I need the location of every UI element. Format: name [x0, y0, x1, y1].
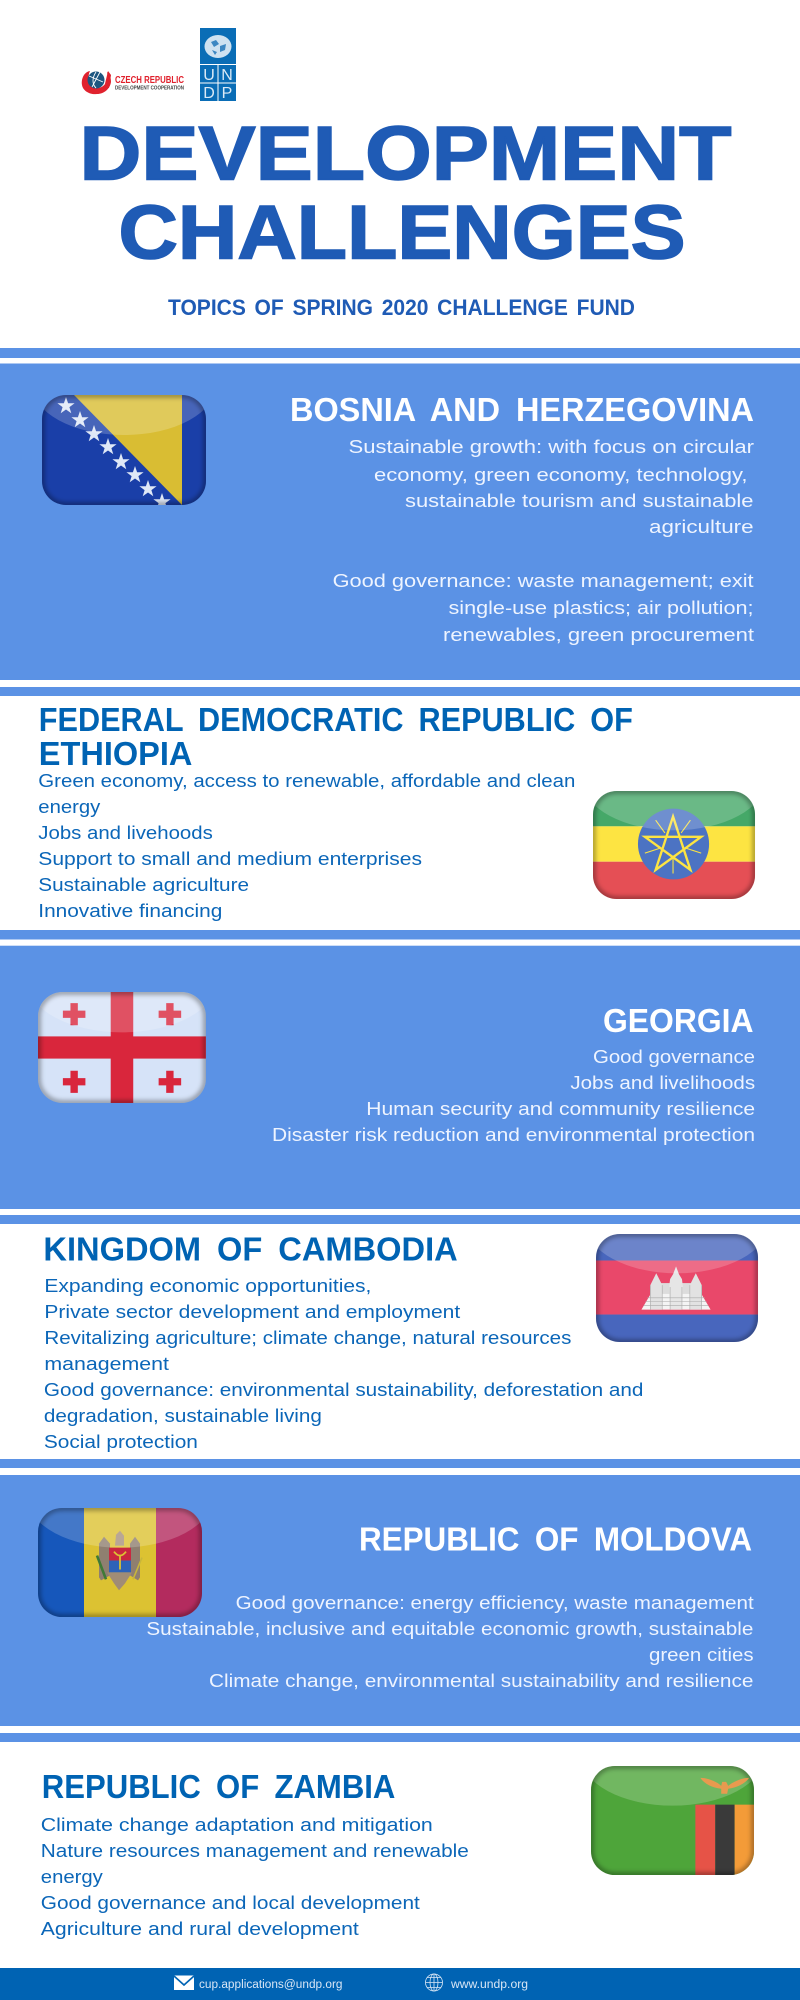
icon: flag of Moldova — [38, 1508, 202, 1617]
text block: Georgia topics: Human security and community resilience — [366, 1098, 755, 1119]
text block: Ethiopia topics: Green economy, access to renewable, affordable and clean — [38, 770, 575, 791]
logo: UNDP — [200, 28, 236, 102]
text block: Zambia topics: Nature resources management and renewable — [41, 1840, 469, 1861]
subtitle: TOPICS OF SPRING 2020 CHALLENGE FUND — [168, 295, 635, 320]
heading: Bosnia and Herzegovina: BOSNIA AND HERZEGOVINA — [290, 391, 754, 428]
text block: Ethiopia topics: Sustainable agriculture — [38, 874, 249, 895]
text block: Bosnia topics: Good governance: waste management; exit — [333, 570, 754, 591]
heading: Moldova: REPUBLIC OF MOLDOVA — [359, 1521, 752, 1558]
text block: Zambia topics: energy — [41, 1866, 104, 1887]
text block: Bosnia topics: sustainable tourism and sustainable — [405, 490, 754, 511]
text block: Cambodia topics — [44, 1275, 643, 1452]
icon: flag of Ethiopia — [593, 791, 755, 899]
text block: Bosnia topics — [333, 436, 754, 645]
logo: Czech Republic Development Cooperation — [82, 71, 184, 94]
text block: Ethiopia topics: Support to small and medium enterprises — [38, 848, 422, 869]
text block: Cambodia topics: management — [44, 1353, 169, 1374]
panel: Republic of Zambia — [40, 1766, 754, 1939]
text block: Moldova topics: Good governance: energy efficiency, waste management — [236, 1592, 754, 1613]
text block: Ethiopia topics: Jobs and livehoods — [38, 822, 213, 843]
icon: flag of Georgia — [38, 992, 206, 1103]
heading: Ethiopia: FEDERAL DEMOCRATIC REPUBLIC OF — [39, 701, 633, 738]
title — [80, 112, 731, 276]
text block: Moldova topics: green cities — [649, 1644, 754, 1665]
icon: flag of Cambodia — [596, 1234, 758, 1342]
heading: Zambia: REPUBLIC OF ZAMBIA — [42, 1768, 395, 1805]
logo: UNDP: D — [203, 85, 215, 102]
footer bar — [0, 1968, 800, 2000]
text block: Ethiopia topics — [38, 770, 575, 921]
text block: Bosnia topics: agriculture — [649, 516, 754, 537]
text block: Moldova topics: Climate change, environmental sustainability and resilience — [209, 1670, 753, 1691]
panel: Bosnia and Herzegovina — [0, 335, 800, 680]
logo: Czech Republic Development Cooperation: DEVELOPMENT COOPERATION — [115, 86, 184, 92]
logo: UNDP: U — [203, 67, 215, 84]
heading: Georgia: GEORGIA — [603, 1002, 754, 1039]
text block: Bosnia topics: renewables, green procurement — [443, 624, 754, 645]
contact: email: cup.applications@undp.org — [199, 1979, 342, 1991]
text block: Georgia topics: Disaster risk reduction and environmental protection — [272, 1124, 755, 1145]
panel: Federal Democratic Republic of Ethiopia — [38, 708, 755, 921]
icon: flag of Zambia — [591, 1766, 754, 1875]
text block: Bosnia topics: Sustainable growth: with focus on circular — [348, 436, 754, 457]
text block: Georgia topics: Good governance — [593, 1046, 755, 1067]
text block: Bosnia topics: economy, green economy, technology, — [374, 464, 748, 485]
text block: Cambodia topics: Social protection — [44, 1431, 198, 1452]
text block: Ethiopia topics: Innovative financing — [38, 900, 222, 921]
text block: Cambodia topics: Good governance: environmental sustainability, deforestation and — [44, 1379, 643, 1400]
panel: Republic of Moldova — [0, 1449, 800, 1726]
text block: Cambodia topics: degradation, sustainable living — [44, 1405, 322, 1426]
text block: Moldova topics — [146, 1592, 754, 1691]
heading: Cambodia: KINGDOM OF CAMBODIA — [43, 1231, 458, 1268]
title: CHALLENGES — [118, 190, 686, 276]
heading: Ethiopia: ETHIOPIA — [39, 735, 192, 772]
panel: Kingdom of Cambodia — [44, 1234, 758, 1452]
contact: website: www.undp.org — [450, 1979, 528, 1991]
text block: Zambia topics: Good governance and local development — [41, 1892, 420, 1913]
text block: Cambodia topics: Private sector development and employment — [44, 1301, 460, 1322]
text block: Georgia topics — [272, 1046, 755, 1145]
title: DEVELOPMENT — [80, 112, 731, 196]
text block: Cambodia topics: Expanding economic opportunities, — [44, 1275, 371, 1296]
text block: Georgia topics: Jobs and livelihoods — [570, 1072, 755, 1093]
icon: flag of Bosnia and Herzegovina — [42, 395, 206, 505]
text block: Bosnia topics: single-use plastics; air pollution; — [448, 597, 754, 618]
text block: Zambia topics — [41, 1814, 469, 1939]
logo: UNDP: P — [222, 85, 232, 102]
panel: Georgia — [0, 931, 800, 1209]
icon: envelope — [174, 1976, 194, 1990]
logo: Czech Republic Development Cooperation: CZECH REPUBLIC — [115, 75, 184, 86]
text block: Cambodia topics: Revitalizing agriculture; climate change, natural resources — [44, 1327, 571, 1348]
logo: UNDP: N — [221, 67, 233, 84]
text block: Zambia topics: Agriculture and rural development — [41, 1918, 359, 1939]
text block: Moldova topics: Sustainable, inclusive and equitable economic growth, sustainable — [146, 1618, 753, 1639]
heading: Ethiopia — [39, 701, 633, 772]
text block: Zambia topics: Climate change adaptation and mitigation — [41, 1814, 433, 1835]
icon: globe — [426, 1974, 442, 1991]
text block: Ethiopia topics: energy — [38, 796, 101, 817]
